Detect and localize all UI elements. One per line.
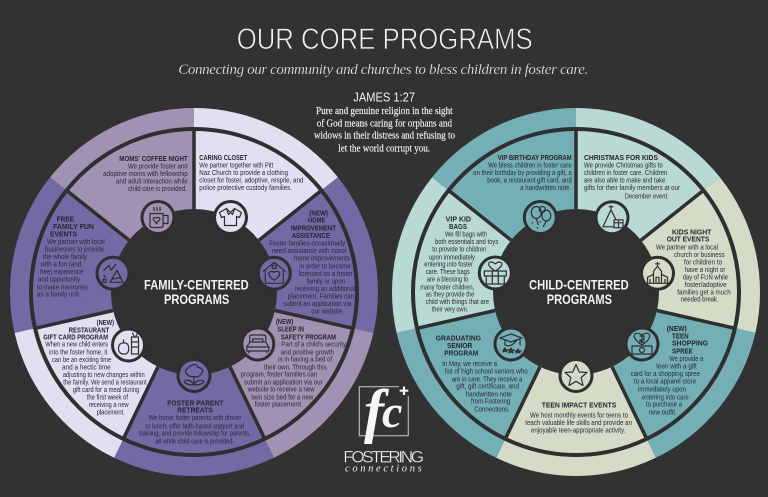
text: moms' coffee night: We provide foster and xyxy=(128,164,188,171)
segment: vip birthday program xyxy=(432,108,576,292)
text: kids night out events: foster/adoptive xyxy=(685,282,727,289)
text: foster parent retreats: all while child care is provided. xyxy=(155,438,234,445)
icon: christmas tree and gift xyxy=(596,202,628,234)
icon: gift with heart xyxy=(479,257,511,289)
segment: free family fun events xyxy=(10,177,194,333)
icon: graduation cap xyxy=(495,328,527,360)
text: teen shopping spree: to a local apparel store xyxy=(634,378,696,385)
text: kids night out events: KIDS NIGHT xyxy=(672,229,712,236)
text: foster parent retreats: FOSTER PARENT xyxy=(167,400,224,407)
heading: child-centered programs: PROGRAMS xyxy=(547,291,612,307)
text: sleep in safety program: their own. Through this xyxy=(264,364,327,371)
text: foster parent retreats: or lunch, offer faith-based support and xyxy=(145,423,244,430)
text: vip kid bags: many foster children, xyxy=(420,284,474,291)
text: restaurant gift card program: receiving a new xyxy=(89,402,129,409)
text: graduating senior program: Connections. xyxy=(474,406,510,413)
text: restaurant gift card program: When a new child enters xyxy=(45,342,108,349)
text: restaurant gift card program: can be an exciting time xyxy=(52,357,111,364)
text: graduating senior program xyxy=(436,336,528,413)
heading: family-centered programs xyxy=(144,276,249,307)
text: restaurant gift card program: into the foster home, it xyxy=(49,349,107,356)
text: vip kid bags xyxy=(420,216,499,314)
scripture verse: of God means caring for orphans and xyxy=(317,119,452,130)
text: sleep in safety program: foster placement. xyxy=(255,402,303,409)
text: teen impact events xyxy=(525,402,632,435)
segment: home improvement assistance xyxy=(194,177,378,333)
text: free family fun events: FAMILY FUN xyxy=(53,224,94,231)
text: kids night out events xyxy=(656,229,731,304)
text: free family fun events: free) experience xyxy=(40,269,83,276)
text: free family fun events: We partner with local xyxy=(47,239,105,246)
icon: money and heart xyxy=(626,328,658,360)
text: christmas for kids: are also able to make and take xyxy=(584,178,665,185)
text: sleep in safety program: website to receive a new xyxy=(247,387,316,394)
text: christmas for kids xyxy=(584,155,681,200)
icon: coffee mug xyxy=(142,202,174,234)
text: kids night out events: have a night or xyxy=(685,267,726,274)
text: vip kid bags: We fill bags with xyxy=(445,231,487,238)
text: sleep in safety program xyxy=(241,319,346,409)
text: teen impact events: enjoyable teen-appropriate activity. xyxy=(531,428,625,435)
icon: pumpkin and vegetables xyxy=(112,329,144,361)
text: graduating senior program: gift, gift certificate, and xyxy=(456,384,519,391)
text: caring closet: CARING CLOSET xyxy=(199,155,248,162)
text: sleep in safety program: Part of a child's security xyxy=(281,342,346,349)
text: vip birthday program xyxy=(473,155,572,192)
icon: star xyxy=(560,360,592,392)
text: sleep in safety program: and positive growth xyxy=(281,349,334,356)
text: teen shopping spree: new outfit. xyxy=(649,409,677,416)
text: christmas for kids: We provide Christmas gifts to xyxy=(584,162,663,169)
text: restaurant gift card program: (NEW) xyxy=(97,320,114,327)
text: christmas for kids: children in foster care. Children xyxy=(584,170,667,177)
text: caring closet: police protective custody families. xyxy=(199,185,292,192)
text: vip kid bags: care. These bags xyxy=(426,269,470,276)
text: caring closet: We partner together with Pitt xyxy=(199,162,273,169)
text: restaurant gift card program: the first week of xyxy=(87,394,128,401)
segment: teen shopping spree xyxy=(576,292,755,458)
logo wordmark: FOSTERING xyxy=(343,448,424,467)
text: vip birthday program: a handwritten note. xyxy=(520,185,571,192)
text: home improvement assistance xyxy=(269,210,356,315)
icon: shirt xyxy=(214,202,246,234)
segment: caring closet xyxy=(194,108,338,292)
text: restaurant gift card program: adjusting to new changes within xyxy=(63,372,145,379)
text: vip kid bags: entering into foster xyxy=(424,262,474,269)
text: christmas for kids: gifts for their family members at our xyxy=(584,185,681,192)
text: home improvement assistance: our website. xyxy=(311,308,344,315)
text: vip birthday program: VIP BIRTHDAY PROGRAM xyxy=(498,155,572,162)
scripture reference: JAMES 1:27 xyxy=(353,90,415,105)
text: teen shopping spree: immediately upon xyxy=(638,387,686,394)
text: vip kid bags: BAGS xyxy=(449,224,467,231)
text: home improvement assistance: licensed as a foster xyxy=(299,271,353,278)
heading: family-centered programs: PROGRAMS xyxy=(164,291,229,307)
text: graduating senior program: In May, we receive a xyxy=(442,361,497,368)
segment: vip kid bags xyxy=(392,177,576,333)
text: graduating senior program: PROGRAM xyxy=(444,351,478,358)
text: restaurant gift card program: RESTAURANT xyxy=(69,327,110,334)
text: teen shopping spree: SHOPPING xyxy=(672,341,709,348)
text: graduating senior program: GRADUATING xyxy=(436,336,482,343)
text: teen impact events: We host monthly events for teens to xyxy=(530,412,628,419)
icon: bed xyxy=(242,328,274,360)
text: teen shopping spree xyxy=(631,326,709,416)
text: restaurant gift card program: gift card for a meal during xyxy=(73,387,139,394)
text: sleep in safety program: SAFETY PROGRAM xyxy=(281,334,336,341)
text: free family fun events: EVENTS xyxy=(50,232,77,239)
text: home improvement assistance: IMPROVEMENT xyxy=(291,225,337,232)
text: home improvement assistance: home improvements xyxy=(294,256,350,263)
text: teen shopping spree: SPREE xyxy=(672,348,693,355)
text: christmas for kids: December event. xyxy=(625,193,669,200)
logo frame xyxy=(359,387,408,436)
text: graduating senior program: list of high school seniors who xyxy=(445,369,528,376)
logo monogram c: c xyxy=(382,386,402,437)
text: home improvement assistance: submit an application via xyxy=(283,301,351,308)
scripture verse: let the world corrupt you. xyxy=(338,144,430,155)
text: sleep in safety program: submit an application via our xyxy=(244,379,323,386)
text: moms' coffee night: adoptive moms with fellowship xyxy=(103,171,188,178)
text: free family fun events: as a family unit. xyxy=(37,292,81,299)
text: restaurant gift card program xyxy=(43,320,147,416)
text: teen shopping spree: (NEW) xyxy=(667,326,687,333)
text: sleep in safety program: twin size bed for a new xyxy=(251,394,314,401)
text: moms' coffee night: child care is provided. xyxy=(128,186,187,193)
segment: teen impact events xyxy=(496,292,656,476)
scripture verse: Pure and genuine religion in the sight xyxy=(316,106,453,117)
segment: kids night out events xyxy=(576,177,760,333)
text: teen impact events: teach valuable life skills and provide an xyxy=(525,420,632,427)
heading: child-centered programs xyxy=(529,276,629,307)
text: free family fun events: the whole family xyxy=(43,254,87,261)
text: free family fun events: to make memories xyxy=(37,284,88,291)
scripture verse: widows in their distress and refusing to xyxy=(314,131,455,142)
text: sleep in safety program: SLEEP IN xyxy=(277,327,304,334)
text: vip kid bags: both essentials and toys xyxy=(435,239,499,246)
segment: restaurant gift card program xyxy=(15,292,194,458)
text: free family fun events: with a fun (and xyxy=(40,262,81,269)
text: foster parent retreats: training, and provide fellowship for parents, xyxy=(139,431,251,438)
text: sleep in safety program: (NEW) xyxy=(276,319,293,326)
text: home improvement assistance: in order to become xyxy=(299,263,351,270)
text: restaurant gift card program: placement. xyxy=(97,409,125,416)
text: foster parent retreats: We honor foster parents with dinner xyxy=(149,415,242,422)
text: free family fun events: and opportunity xyxy=(38,277,80,284)
text: teen shopping spree: entering into care xyxy=(642,394,689,401)
chart: family-centered wheel xyxy=(10,108,378,476)
text: vip kid bags: upon immediately xyxy=(429,254,475,261)
segment: sleep in safety program xyxy=(194,292,373,458)
heading: child-centered programs: CHILD-CENTERED xyxy=(529,276,629,292)
text: teen shopping spree: TEEN xyxy=(672,333,689,340)
text: teen shopping spree: We provide a xyxy=(669,356,703,363)
text: restaurant gift card program: and a hectic time xyxy=(62,364,111,371)
text: home improvement assistance: family or upon xyxy=(307,278,345,285)
text: graduating senior program: handwritten note xyxy=(466,391,512,398)
text: kids night out events: families get a much xyxy=(677,289,731,296)
segment: graduating senior program xyxy=(397,292,576,458)
text: caring closet: Naz Church to provide a clothing xyxy=(199,170,288,177)
text: kids night out events: day of FUN while xyxy=(683,274,728,281)
text: sleep in safety program: is in having a bed of xyxy=(278,357,332,364)
text: restaurant gift card program: GIFT CARD PROGRAM xyxy=(43,334,108,341)
text: home improvement assistance: Foster families occasionally xyxy=(269,240,346,247)
text: vip kid bags: as they provide the xyxy=(426,292,474,299)
title: OUR CORE PROGRAMS xyxy=(237,23,533,56)
heading: family-centered programs: FAMILY-CENTERED xyxy=(144,276,249,292)
logo monogram: f xyxy=(364,378,389,444)
text: sleep in safety program: program, foster families can xyxy=(241,372,317,379)
text: vip birthday program: book, a restaurant gift card, and xyxy=(487,178,572,185)
segment: moms' coffee night xyxy=(50,108,194,292)
segment: foster parent retreats xyxy=(114,292,274,476)
text: graduating senior program: are in care. They receive a xyxy=(452,376,522,383)
text: free family fun events: businesses to provide xyxy=(45,247,104,254)
text: restaurant gift card program: the family. We send a restaurant xyxy=(63,379,147,386)
text: home improvement assistance: (NEW) xyxy=(309,210,328,217)
text: vip birthday program: on their birthday by providing a gift, a xyxy=(473,170,572,177)
text: vip birthday program: We bless children in foster care xyxy=(488,162,572,169)
text: moms' coffee night: MOMS' COFFEE NIGHT xyxy=(119,156,188,163)
icon: balloons xyxy=(524,202,556,234)
icon: party hat and flag xyxy=(97,257,129,289)
text: graduating senior program: SENIOR xyxy=(447,343,472,350)
text: kids night out events: needed break. xyxy=(681,297,719,304)
text: free family fun events xyxy=(37,217,105,299)
text: caring closet: closet for foster, adoptive, respite, and xyxy=(199,178,303,185)
subtitle: Connecting our community and churches to bless children in foster care. xyxy=(178,62,588,78)
logo script: connections xyxy=(345,464,422,475)
text: teen shopping spree: to purchase a xyxy=(646,402,682,409)
icon: church xyxy=(642,257,674,289)
text: home improvement assistance: receiving an additional xyxy=(295,286,356,293)
chart: child-centered wheel xyxy=(392,108,760,476)
text: vip kid bags: their very own. xyxy=(432,307,468,314)
icon: house with heart xyxy=(258,257,290,289)
scripture verse xyxy=(314,106,455,155)
text: vip kid bags: to provide to children xyxy=(432,247,486,254)
text: home improvement assistance: need assistance with minor xyxy=(272,248,347,255)
text: caring closet xyxy=(199,155,303,192)
text: kids night out events: for children to xyxy=(684,259,722,266)
text: foster parent retreats xyxy=(139,400,251,445)
text: moms' coffee night xyxy=(103,156,188,193)
text: kids night out events: church or business xyxy=(674,252,725,259)
text: graduating senior program: from Fostering xyxy=(471,399,510,406)
text: home improvement assistance: placement. Families can xyxy=(288,293,354,300)
text: home improvement assistance: ASSISTANCE xyxy=(292,233,330,240)
text: moms' coffee night: and adult interaction while xyxy=(116,179,188,186)
text: vip kid bags: child with things that are xyxy=(426,299,489,306)
segment: christmas for kids xyxy=(576,108,720,292)
text: vip kid bags: VIP KID xyxy=(446,216,471,223)
text: teen shopping spree: teen with a gift xyxy=(656,363,697,370)
text: foster parent retreats: RETREATS xyxy=(177,408,213,415)
icon: flower xyxy=(178,360,210,392)
text: christmas for kids: CHRISTMAS FOR KIDS xyxy=(584,155,658,162)
logo: fostering connections xyxy=(343,378,424,475)
logo plus xyxy=(400,386,408,395)
text: home improvement assistance: HOME xyxy=(308,218,326,225)
text: vip kid bags: are a blessing to xyxy=(427,277,468,284)
text: free family fun events: FREE xyxy=(57,217,74,224)
text: teen impact events: TEEN IMPACT EVENTS xyxy=(542,402,617,409)
text: teen shopping spree: card for a shopping spree xyxy=(631,371,700,378)
text: kids night out events: We partner with a local xyxy=(656,244,718,251)
text: kids night out events: OUT EVENTS xyxy=(667,237,710,244)
